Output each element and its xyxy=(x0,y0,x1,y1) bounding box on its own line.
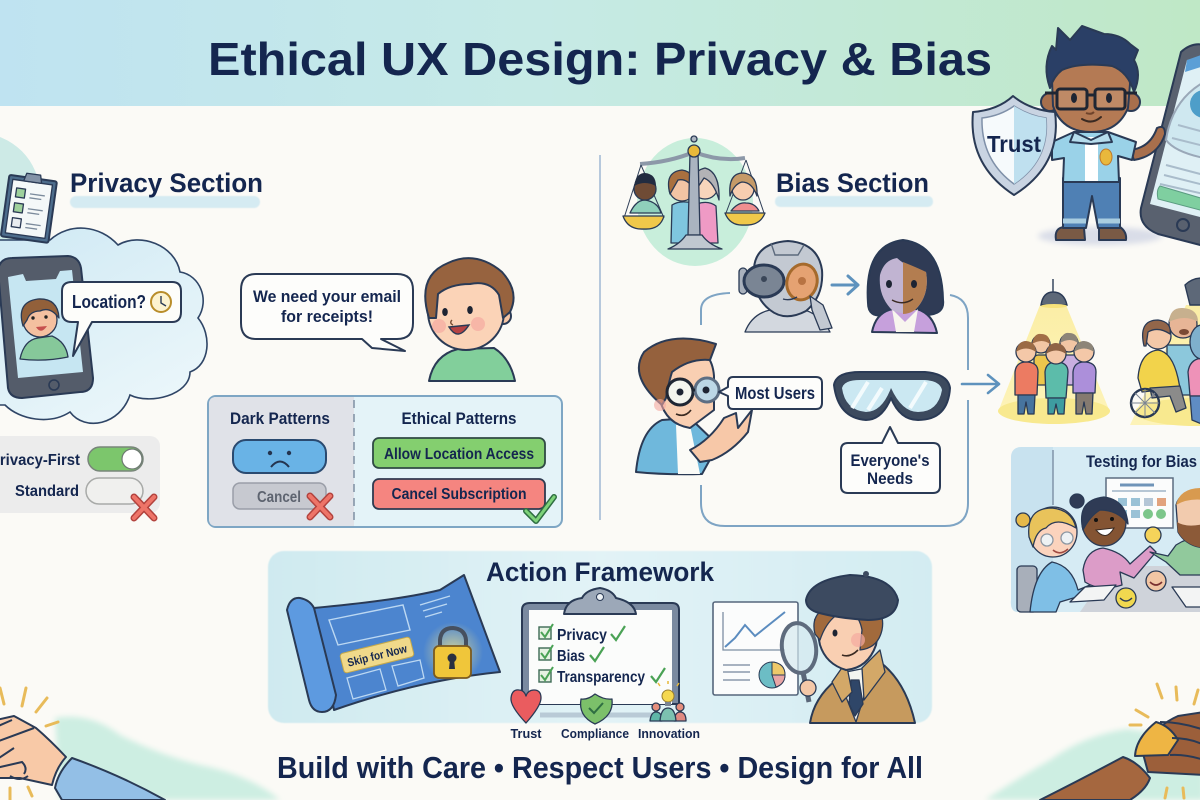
bearded tester xyxy=(1150,488,1200,575)
toggle panel xyxy=(0,436,160,518)
hand xyxy=(0,716,66,785)
icon: cloud xyxy=(0,228,207,423)
trust shield xyxy=(973,96,1056,195)
dark patterns: Dark Patterns xyxy=(230,409,330,428)
person in wheelchair xyxy=(1138,350,1180,392)
email speech bubble: for receipts! xyxy=(281,307,373,326)
centre people xyxy=(671,202,694,243)
brown hand xyxy=(1142,712,1200,775)
tagline: Build with Care • Respect Users • Design for All xyxy=(277,750,923,785)
character: designer with glasses xyxy=(636,339,752,474)
check rows xyxy=(539,624,665,686)
heading underline xyxy=(70,196,260,208)
dark-haired tester xyxy=(1070,494,1156,588)
tablets xyxy=(1070,585,1116,602)
glasses xyxy=(1057,89,1087,109)
icon: compliance shield xyxy=(581,694,612,724)
location speech bubble xyxy=(62,282,181,356)
icon: heart xyxy=(511,690,541,723)
character: smiling boy xyxy=(425,258,515,381)
right person in pan xyxy=(731,203,759,211)
woman with hijab xyxy=(1188,358,1200,396)
label: innovation: Innovation xyxy=(638,726,700,741)
ethical patterns xyxy=(373,409,554,521)
teal circle behind clipboard xyxy=(0,133,40,257)
table xyxy=(1080,566,1200,612)
panel: dark vs ethical patterns xyxy=(208,396,562,527)
blonde tester xyxy=(1016,507,1090,612)
heading: bias section: Bias Section xyxy=(776,168,929,198)
bracket: bias loop xyxy=(701,293,968,526)
icon: red x xyxy=(134,497,154,518)
icon: analytics report xyxy=(713,602,798,695)
icon: robot with lens xyxy=(739,241,832,332)
connector bar xyxy=(540,712,654,718)
arrow: robot to woman xyxy=(832,276,858,294)
trust label: Trust xyxy=(987,131,1041,157)
icon: trust character with shield and phone xyxy=(973,26,1200,246)
older man xyxy=(1167,345,1200,395)
most users bubble xyxy=(719,377,822,409)
ears xyxy=(1041,93,1059,111)
icon: goggles xyxy=(834,372,950,420)
most users bubble: Most Users xyxy=(735,383,815,403)
hair xyxy=(1046,26,1138,92)
dark patterns xyxy=(230,409,330,517)
illustration: left handshake xyxy=(0,688,280,800)
icon: phone with user xyxy=(0,256,93,398)
section: bias xyxy=(623,136,1200,612)
heading: privacy section: Privacy Section xyxy=(70,168,263,198)
sparks xyxy=(1130,684,1198,798)
header band xyxy=(0,0,1200,106)
ethical patterns: Ethical Patterns xyxy=(402,409,516,428)
title: Ethical UX Design: Privacy & Bias xyxy=(208,33,992,85)
check rows: Transparency xyxy=(557,669,645,686)
sleeve xyxy=(55,758,165,800)
email speech bubble: We need your email xyxy=(253,287,401,306)
everyone's needs bubble xyxy=(841,427,940,493)
shirt xyxy=(1052,132,1136,182)
divider xyxy=(599,155,601,520)
icon: balance scale with people xyxy=(623,136,765,266)
sparks xyxy=(0,688,58,800)
location speech bubble: Location? xyxy=(72,292,146,312)
check rows: Privacy xyxy=(557,627,607,644)
icon: clipboard xyxy=(1,171,58,243)
arm xyxy=(1130,127,1165,160)
ethical patterns: Allow Location Access xyxy=(384,446,534,463)
spotlight: diverse group xyxy=(1130,278,1200,426)
everyone's needs bubble: Everyone's xyxy=(850,452,930,470)
emoji feedback xyxy=(1116,527,1166,608)
front row xyxy=(1015,362,1038,395)
character: split-tone woman xyxy=(868,240,943,333)
heading underline xyxy=(775,196,933,207)
character: detective xyxy=(779,571,915,723)
magnifying glass xyxy=(779,621,819,702)
jeans xyxy=(1063,178,1120,228)
test screen xyxy=(1106,478,1173,528)
icon: clock xyxy=(151,292,171,312)
sleeve and arm xyxy=(1040,757,1150,800)
large phone xyxy=(1141,44,1200,246)
shoes xyxy=(1056,227,1085,240)
left person in pan xyxy=(630,200,661,213)
dark patterns: Cancel xyxy=(257,489,301,506)
icon: innovation team with bulb xyxy=(650,681,686,721)
icon: padlock xyxy=(434,628,471,678)
email speech bubble xyxy=(241,274,413,351)
everyone's needs bubble: Needs xyxy=(867,470,913,488)
icon: checklist clipboard xyxy=(522,588,679,704)
icon: blueprint with lock xyxy=(287,575,500,712)
skip for now label: Skip for Now xyxy=(346,643,408,670)
arrow: to spotlights xyxy=(962,375,999,393)
label: trust: Trust xyxy=(510,726,542,741)
panel: action framework xyxy=(268,551,932,741)
spotlight: homogeneous group xyxy=(998,279,1110,424)
section: privacy xyxy=(0,133,562,527)
illustration: right handshake xyxy=(985,684,1200,800)
ethical patterns: Cancel Subscription xyxy=(392,486,526,503)
scale column xyxy=(688,152,700,235)
toggle panel: Standard xyxy=(15,483,79,500)
yellow hand xyxy=(1135,722,1178,756)
skip for now label xyxy=(340,637,414,673)
head xyxy=(1052,60,1130,132)
label: compliance: Compliance xyxy=(561,726,629,741)
back row xyxy=(1034,355,1056,385)
heading: action framework: Action Framework xyxy=(486,557,714,587)
panel: testing for bias xyxy=(1011,447,1200,612)
check rows: Bias xyxy=(557,648,585,665)
